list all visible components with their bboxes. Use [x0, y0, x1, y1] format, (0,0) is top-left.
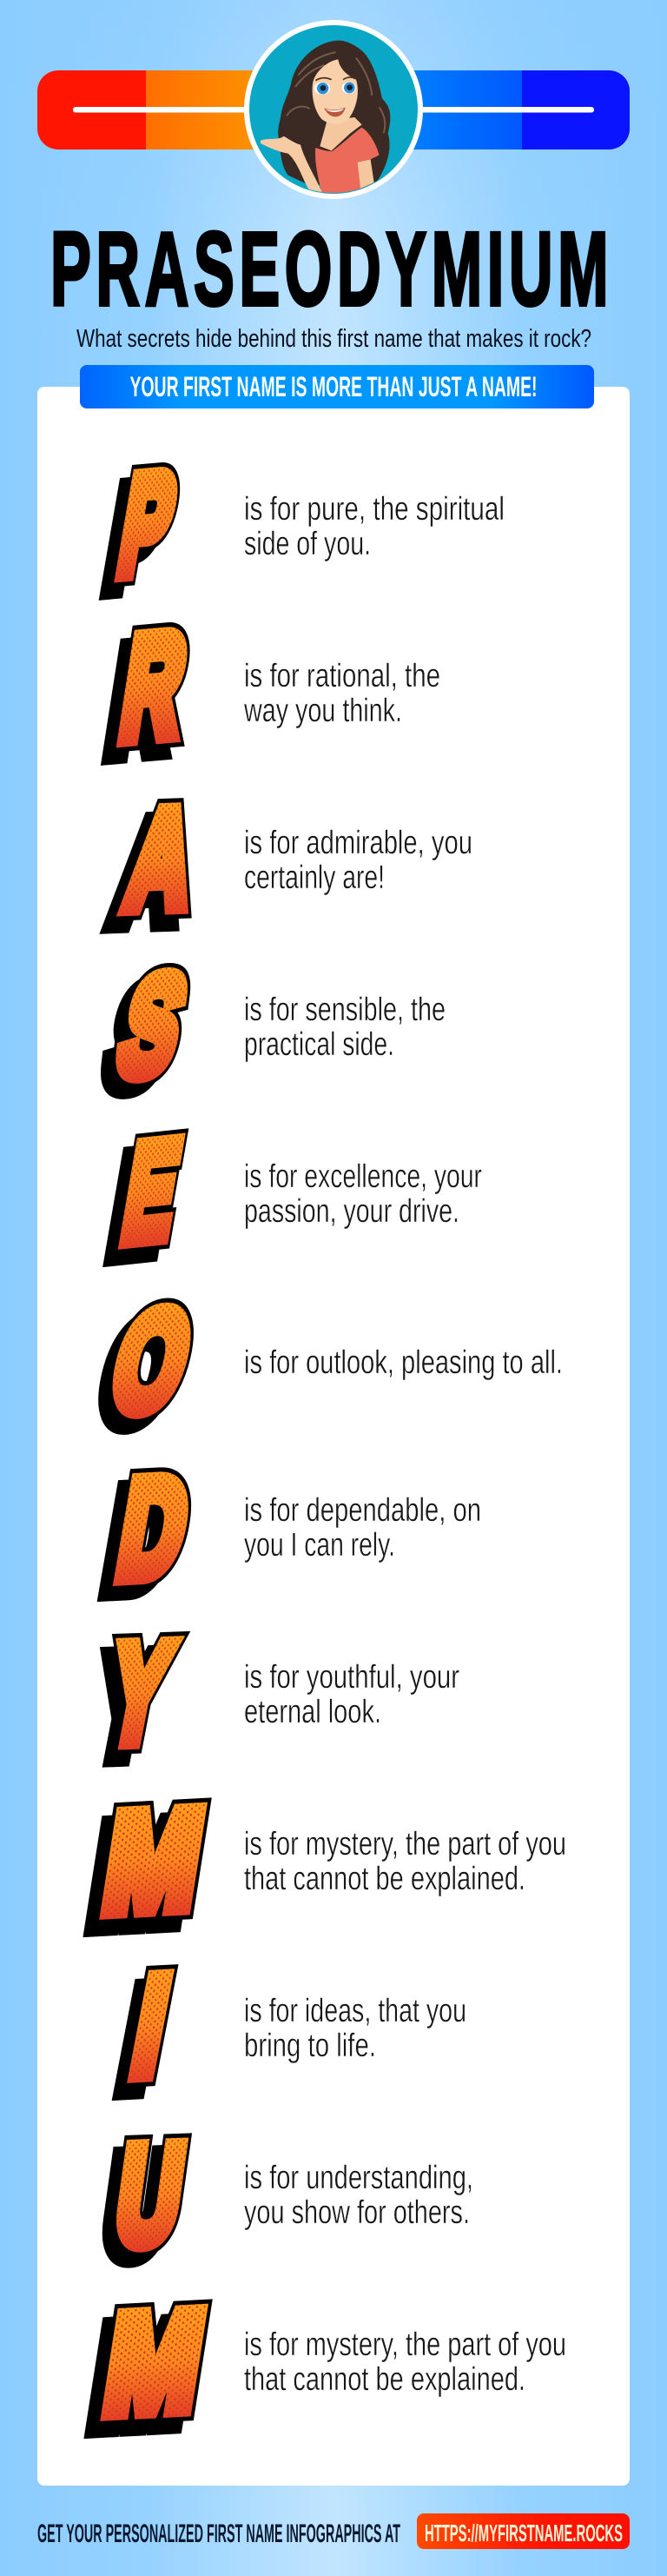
description Y [244, 1659, 459, 1730]
row: I [111, 1949, 466, 2117]
description A: certainly are! [244, 860, 385, 896]
description E: is for excellence, your [244, 1159, 482, 1195]
description E: passion, your drive. [244, 1193, 459, 1230]
row: P [98, 444, 505, 617]
letter E: E [114, 1112, 188, 1271]
description I: bring to life. [244, 2028, 376, 2064]
description P [244, 491, 505, 562]
description R [243, 658, 440, 729]
letter D: D [109, 1450, 198, 1607]
letter E: E [102, 1125, 176, 1284]
description M: that cannot be explained. [244, 1861, 525, 1897]
letter U: U [109, 2118, 191, 2274]
description M second: that cannot be explained. [244, 2361, 525, 2398]
letter O: O [100, 1280, 203, 1441]
row: O [89, 1280, 563, 1452]
description P: is for pure, the spiritual [244, 491, 505, 528]
row: S [94, 946, 446, 1116]
description D [244, 1492, 481, 1564]
description P: side of you. [244, 526, 371, 562]
letter M: M [96, 1781, 211, 1941]
description Y: is for youthful, your [244, 1659, 459, 1696]
description U: is for understanding, [244, 2160, 473, 2196]
description U: you show for others. [244, 2194, 470, 2231]
row: R [100, 602, 440, 782]
letter O: O [100, 1280, 203, 1441]
letter M second: M [84, 2295, 200, 2455]
row: E [102, 1112, 482, 1284]
letter Y: Y [97, 1616, 182, 1772]
letter D: D [109, 1450, 198, 1607]
description E [244, 1159, 482, 1230]
letter O: O [100, 1280, 203, 1441]
letter A: A [118, 781, 204, 938]
letter S: S [106, 946, 199, 1105]
letter M second: M [96, 2282, 212, 2442]
letter S: S [106, 946, 199, 1105]
letter P: P [110, 444, 184, 604]
letter P: P [110, 444, 184, 604]
panel: white content card [37, 387, 630, 2486]
letter Y: Y [97, 1616, 182, 1772]
letter A: A [118, 781, 204, 938]
description S: is for sensible, the [244, 992, 446, 1028]
description Y: eternal look. [244, 1694, 381, 1730]
description O: is for outlook, pleasing to all. [244, 1344, 563, 1381]
letter O: O [89, 1291, 192, 1452]
description R: way you think. [243, 693, 402, 729]
row: A [106, 781, 472, 951]
letter S: S [106, 946, 199, 1105]
description S [244, 992, 446, 1063]
description I [244, 1993, 466, 2064]
description S: practical side. [244, 1026, 394, 1063]
letter D: D [96, 1461, 186, 1618]
row: M second [84, 2282, 566, 2455]
description M second [244, 2327, 566, 2398]
letter A: A [106, 794, 192, 951]
letter E: E [114, 1112, 188, 1271]
letter R: R [112, 602, 195, 769]
letter Y: Y [85, 1629, 169, 1785]
icon: avatar portrait [244, 20, 423, 199]
description D: you I can rely. [244, 1527, 395, 1564]
banner [80, 365, 594, 408]
letter M second: M [96, 2282, 212, 2442]
description U [244, 2160, 473, 2231]
description M: is for mystery, the part of you [244, 1826, 566, 1862]
letter I: I [111, 1962, 168, 2117]
letter M: M [83, 1794, 199, 1954]
letter I: I [122, 1949, 179, 2104]
header colour bar [37, 70, 630, 149]
letter P: P [98, 457, 172, 617]
letter R: R [112, 602, 195, 769]
footer link button [417, 2513, 630, 2549]
row: M [83, 1781, 566, 1954]
letter M: M [96, 1781, 211, 1941]
letter A: A [118, 781, 204, 938]
letter I: I [122, 1949, 179, 2104]
letter P: P [110, 444, 184, 604]
letter D: D [109, 1450, 198, 1607]
description D: is for dependable, on [244, 1492, 481, 1529]
row: D [96, 1450, 481, 1618]
letter R: R [100, 615, 183, 782]
description M [244, 1826, 566, 1897]
letter M second: M [96, 2282, 212, 2442]
description I: is for ideas, that you [244, 1993, 466, 2029]
letter M: M [96, 1781, 211, 1941]
letter S: S [94, 957, 187, 1116]
letter E: E [114, 1112, 188, 1271]
row: Y [85, 1616, 459, 1785]
letter U: U [109, 2118, 191, 2274]
row: U [97, 2118, 473, 2285]
letter U: U [97, 2129, 180, 2285]
letter Y: Y [97, 1616, 182, 1772]
description A [244, 825, 472, 896]
description R: is for rational, the [244, 658, 440, 694]
letter R: R [112, 602, 195, 769]
description A: is for admirable, you [244, 825, 472, 861]
letter U: U [109, 2118, 191, 2274]
title: PRASEODYMIUM [50, 209, 609, 328]
description M second: is for mystery, the part of you [244, 2327, 566, 2363]
letter I: I [122, 1949, 179, 2104]
